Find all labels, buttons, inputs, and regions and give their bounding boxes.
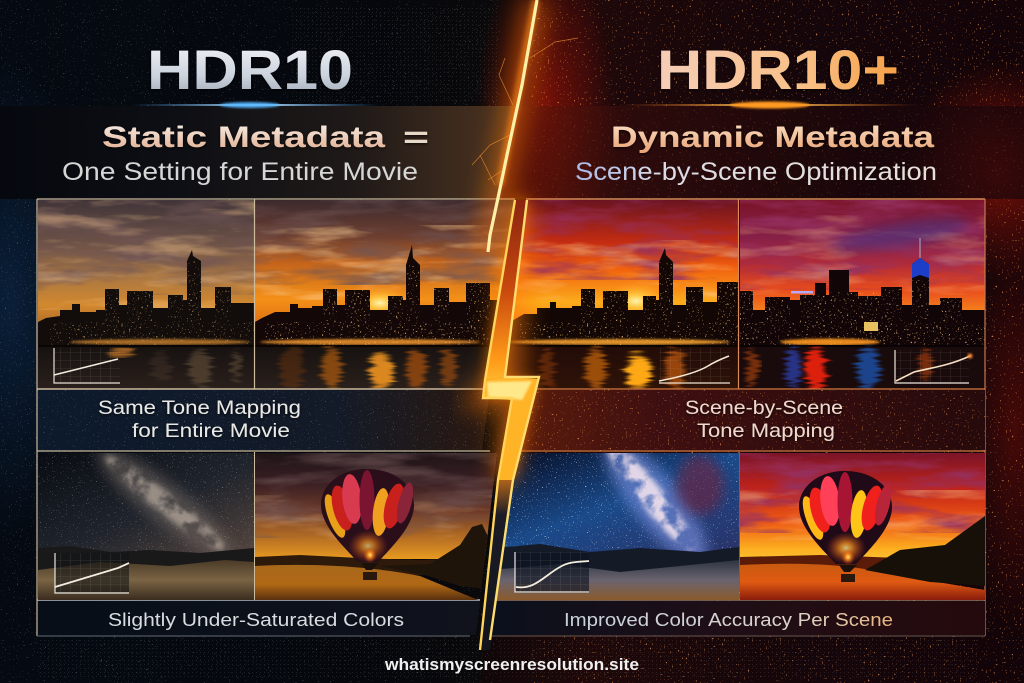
header band: right: [500, 106, 1024, 199]
heading: HDR10+: HDR10+: [657, 38, 899, 101]
caption text: scene-by-scene: Scene-by-Scene: [685, 397, 843, 419]
description: scene optimization: Scene-by-Scene Optimization: [575, 158, 937, 186]
equals sign: =: [403, 121, 429, 154]
caption panel: improved color accuracy: [488, 601, 985, 635]
caption text: same tone mapping: Same Tone Mapping: [98, 397, 301, 419]
panel: HDR10+ city, vivid: [500, 200, 740, 390]
panel frame: HDR10: [37, 199, 515, 636]
lightning bolt divider: [472, 0, 578, 650]
icon: hot air balloon, vivid: [799, 471, 894, 582]
panel: HDR10 night sky: [38, 453, 254, 600]
chart: S-shaped tone curve: [515, 552, 589, 593]
caption text: tone mapping: Tone Mapping: [697, 420, 835, 442]
description: one setting: One Setting for Entire Movie: [62, 158, 418, 186]
chart: flat tone curve: [54, 348, 120, 384]
panel: HDR10 city, warm: [255, 200, 515, 390]
caption panel: scene-by-scene tone mapping: [518, 390, 985, 450]
panel frame: HDR10+: [490, 199, 985, 636]
panel: HDR10+ city, colored lights: [740, 200, 985, 389]
glow divider: blue: [130, 102, 380, 108]
caption panel: same tone mapping: [38, 390, 490, 450]
subheading: static metadata: Static Metadata: [102, 121, 385, 154]
chart: linear tone curve: [55, 553, 129, 593]
panel: HDR10 balloon: [255, 453, 500, 600]
panel: HDR10+ vivid night sky: [497, 453, 739, 600]
header band: left: [0, 106, 515, 199]
caption text: for entire movie: for Entire Movie: [132, 420, 290, 442]
panel: HDR10+ balloon: [740, 453, 985, 600]
glow divider: orange: [620, 102, 920, 108]
chart: adaptive tone curve: [659, 348, 730, 384]
panel: HDR10 city, muted: [38, 200, 254, 389]
caption text: under-saturated: Slightly Under-Saturated Colors: [108, 610, 404, 630]
website label: whatismyscreenresolution.site: [384, 655, 639, 674]
caption text: improved accuracy: Improved Color Accuracy Per Scene: [564, 610, 893, 630]
heading: HDR10: HDR10: [147, 38, 353, 101]
chart: peak tone curve: [895, 350, 972, 384]
subheading: dynamic metadata: Dynamic Metadata: [611, 121, 934, 154]
caption panel: under-saturated colors: [38, 601, 480, 635]
icon: hot air balloon, muted: [321, 469, 416, 580]
